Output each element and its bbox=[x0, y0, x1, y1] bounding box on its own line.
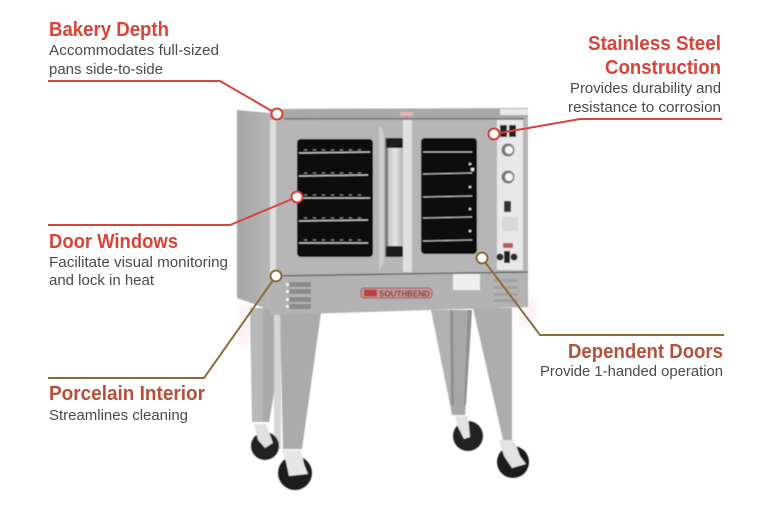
oven illustration bbox=[237, 108, 529, 490]
text: Stainless Steel description: Provides durability and bbox=[570, 81, 721, 97]
marker: Bakery Depth bbox=[272, 108, 282, 120]
door center strip bbox=[403, 120, 412, 272]
text: Stainless Steel description: resistance to corrosion bbox=[568, 100, 721, 116]
marker: Stainless Steel bbox=[488, 128, 500, 140]
left window bbox=[297, 139, 373, 257]
back left leg bbox=[250, 308, 274, 422]
text: Door Windows description: and lock in heat bbox=[49, 273, 154, 289]
text: Stainless Steel description bbox=[568, 81, 721, 116]
heading: Door Windows: Door Windows bbox=[49, 231, 178, 253]
wheels bbox=[251, 416, 529, 490]
text: Dependent Doors description: Provide 1-handed operation bbox=[540, 364, 723, 380]
heading: Bakery Depth: Bakery Depth bbox=[49, 19, 169, 41]
marker: Porcelain Interior bbox=[270, 270, 282, 282]
leader line: Dependent Doors bbox=[482, 258, 724, 335]
right window bbox=[421, 138, 477, 254]
marker: Door Windows bbox=[292, 192, 302, 202]
heading: Stainless Steel Construction: Construction bbox=[605, 57, 721, 79]
callout: Door Windows bbox=[48, 192, 302, 289]
callout: Porcelain Interior bbox=[48, 270, 282, 424]
leader line: Porcelain Interior bbox=[48, 276, 276, 378]
marker: Dependent Doors bbox=[476, 252, 488, 264]
text: Door Windows description: Facilitate visual monitoring bbox=[49, 255, 228, 271]
Southbend badge bbox=[361, 288, 432, 298]
Southbend badge: SOUTHBEND bbox=[379, 290, 430, 298]
heading: Stainless Steel Construction: Stainless Steel bbox=[588, 33, 721, 55]
heading: Porcelain Interior: Porcelain Interior bbox=[49, 383, 205, 405]
text: Door Windows description bbox=[49, 255, 228, 289]
callout: Dependent Doors bbox=[476, 252, 724, 380]
text: Bakery Depth description: pans side-to-side bbox=[49, 62, 163, 78]
oven front bbox=[270, 108, 528, 276]
back right leg bbox=[431, 310, 472, 415]
text: Porcelain Interior description: Streamlines cleaning bbox=[49, 408, 188, 424]
heading: Stainless Steel Construction bbox=[588, 33, 721, 79]
top strip bbox=[270, 108, 528, 120]
callout: Stainless Steel Construction bbox=[488, 33, 722, 140]
callout: Bakery Depth bbox=[48, 19, 282, 120]
text: Bakery Depth description bbox=[49, 43, 219, 78]
door handle bbox=[379, 124, 403, 270]
front left leg bbox=[274, 312, 321, 449]
pink halo behind oven base bbox=[238, 298, 536, 347]
control panel bbox=[496, 120, 523, 270]
leader line: Bakery Depth bbox=[48, 81, 277, 114]
text: Bakery Depth description: Accommodates full-sized bbox=[49, 43, 219, 59]
lower panel bbox=[270, 272, 528, 315]
front right leg bbox=[473, 308, 512, 440]
leader line: Stainless Steel bbox=[494, 119, 722, 134]
heading: Dependent Doors: Dependent Doors bbox=[568, 341, 723, 363]
leader line: Door Windows bbox=[48, 197, 297, 225]
oven side panel bbox=[237, 110, 270, 310]
